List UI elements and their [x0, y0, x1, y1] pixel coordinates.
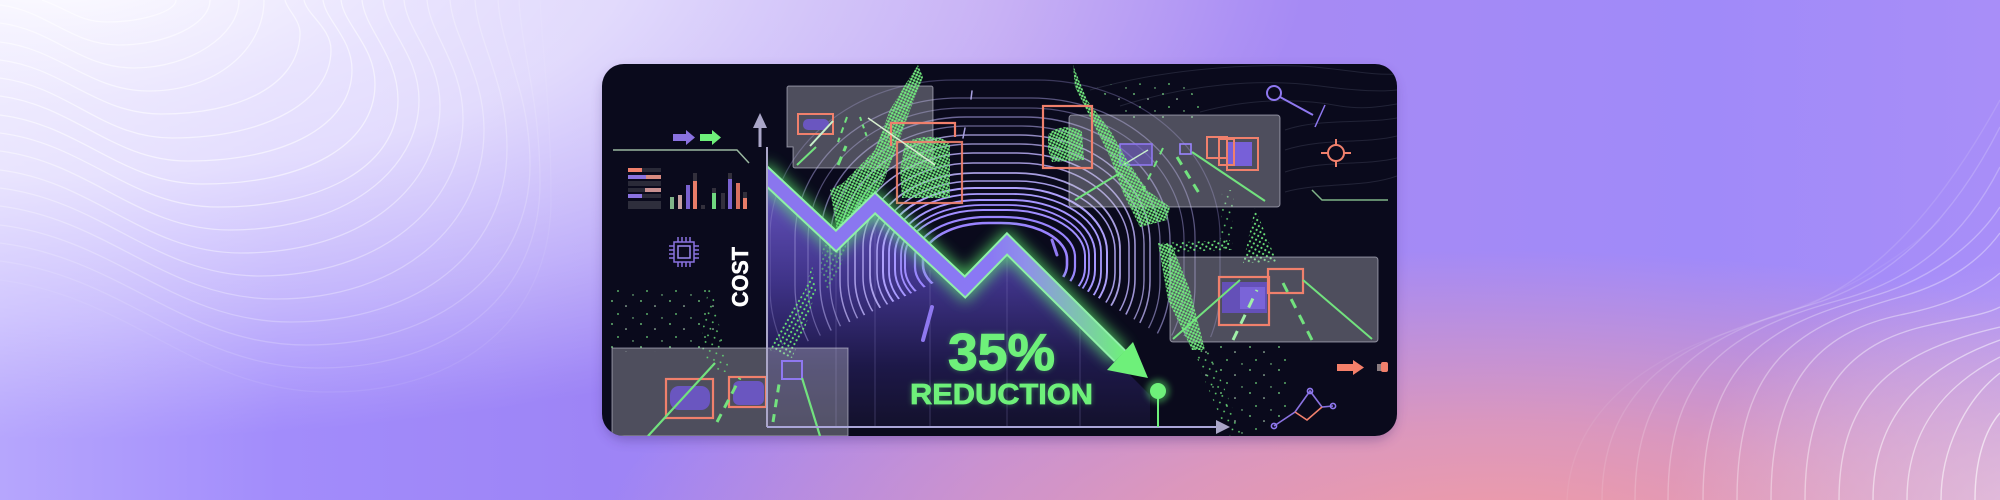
arrow head [1107, 342, 1148, 378]
point cloud: right band [1073, 65, 1170, 227]
axes [753, 113, 1230, 434]
panel: dark chart card [602, 64, 1397, 444]
y axis arrow [753, 113, 767, 147]
point cloud: trailing streak [1190, 345, 1242, 436]
y axis [766, 147, 768, 427]
decorative corner line [1312, 190, 1388, 200]
point cloud: top stripe above right view [1160, 240, 1230, 252]
headline: 35%: 35% [948, 324, 1055, 382]
end point marker [1146, 379, 1170, 427]
grid lines in chart area [836, 211, 1080, 427]
icon: magnifier node [1267, 86, 1325, 127]
icon: orange arrow [1337, 360, 1364, 375]
cost line glow [760, 170, 1120, 356]
decorative header line [613, 150, 749, 163]
point clouds in front of panels [830, 65, 1205, 350]
dash marks near scan [923, 91, 1057, 340]
mini legend bars [628, 168, 661, 209]
card shadow [604, 70, 1395, 440]
point cloud: left car [900, 137, 950, 198]
icon: small arrows [673, 130, 721, 145]
point cloud: right wedge [1243, 208, 1277, 263]
point cloud: right column [1220, 190, 1234, 250]
point cloud: on bottom view [706, 350, 728, 372]
x axis arrow [1216, 420, 1230, 434]
area under the cost line [767, 187, 1150, 427]
overlay: bottom left view [612, 348, 848, 436]
contour lines: top left [0, 0, 551, 392]
point cloud: top centre streak [830, 65, 923, 230]
detection boxes [868, 106, 1092, 203]
overlay: right view [1170, 257, 1378, 342]
contour lines: bottom right [1567, 100, 2000, 500]
lidar scan arcs [770, 79, 1221, 345]
point cloud: sparse lower right [1192, 346, 1286, 434]
cost axis label: COST [727, 247, 753, 307]
icon: crosshair [1321, 139, 1351, 167]
faint background contours in card [1090, 66, 1397, 192]
panel: overlay camera views [612, 86, 1378, 436]
point cloud: left wedge [702, 290, 722, 350]
point cloud: sparse upper right [1097, 83, 1199, 118]
point clouds behind panels [606, 82, 1290, 436]
point cloud: lower centre streak [770, 265, 816, 358]
point cloud: sparse left scatter [611, 290, 720, 352]
icon: orange squares [1377, 362, 1388, 372]
headline glow: REDUCTION [910, 379, 1093, 411]
cost reduction line [760, 170, 1148, 378]
icon: microchip [669, 237, 699, 267]
overlay: top right view [1069, 115, 1280, 207]
headline glow [910, 324, 1093, 411]
mini bar chart [670, 173, 747, 209]
overlay: top left view [787, 86, 933, 168]
headline glow: 35% [948, 324, 1055, 382]
point cloud: lower right mass [1158, 243, 1205, 350]
x axis [767, 426, 1218, 428]
icon: node graph [1271, 388, 1336, 429]
point cloud: faint streak under line [820, 243, 847, 292]
subheadline: reduction: REDUCTION [910, 379, 1093, 411]
point cloud: right car [1048, 127, 1084, 162]
